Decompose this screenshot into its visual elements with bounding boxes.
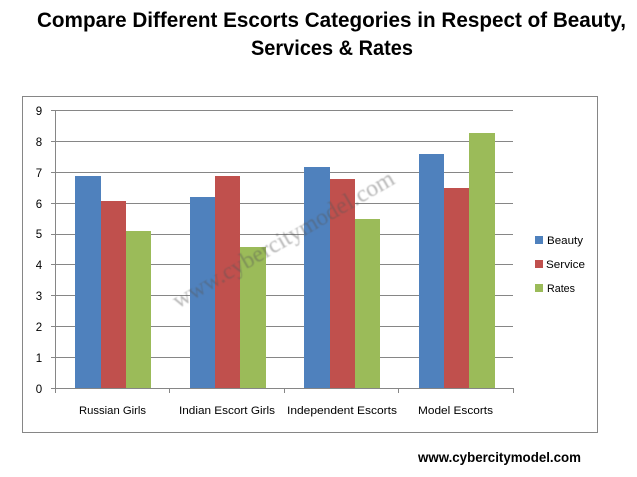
- y axis labels: 6: [36, 199, 42, 211]
- footer url: www.cybercitymodel.com: [417, 450, 581, 465]
- bars: Indian Escort Girls: [190, 176, 266, 388]
- x axis labels: Russian Girls: [79, 405, 147, 417]
- y axis labels: 9: [36, 106, 42, 118]
- x axis labels: Independent Escorts: [287, 405, 398, 417]
- y axis labels: 8: [36, 137, 42, 149]
- watermark: www.cybercitymodel.com: [168, 166, 400, 314]
- y axis labels: 3: [36, 291, 42, 303]
- bars: Model Escorts: [419, 133, 495, 388]
- bars: Independent Escorts: [304, 167, 380, 388]
- x axis labels: Model Escorts: [418, 405, 494, 417]
- title: [37, 9, 626, 60]
- x axis labels: [79, 405, 494, 417]
- legend: Rates: [547, 283, 575, 295]
- title: Services & Rates: [251, 37, 413, 60]
- panel: chart frame: [22, 96, 598, 432]
- legend: Beauty: [547, 235, 584, 247]
- y axis labels: 7: [36, 168, 42, 180]
- y axis labels: 1: [36, 353, 42, 365]
- x axis labels: Indian Escort Girls: [179, 405, 276, 417]
- chart: grid lines and axes: [51, 110, 514, 393]
- legend: [535, 235, 585, 295]
- y axis labels: [36, 106, 43, 396]
- bars: Russian Girls: [75, 176, 151, 388]
- title: Compare Different Escorts Categories in Respect of Beauty,: [37, 9, 626, 32]
- y axis labels: 4: [36, 260, 43, 272]
- y axis labels: 2: [36, 322, 42, 334]
- legend: Service: [546, 259, 585, 271]
- y axis labels: 0: [36, 384, 42, 396]
- y axis labels: 5: [36, 229, 42, 241]
